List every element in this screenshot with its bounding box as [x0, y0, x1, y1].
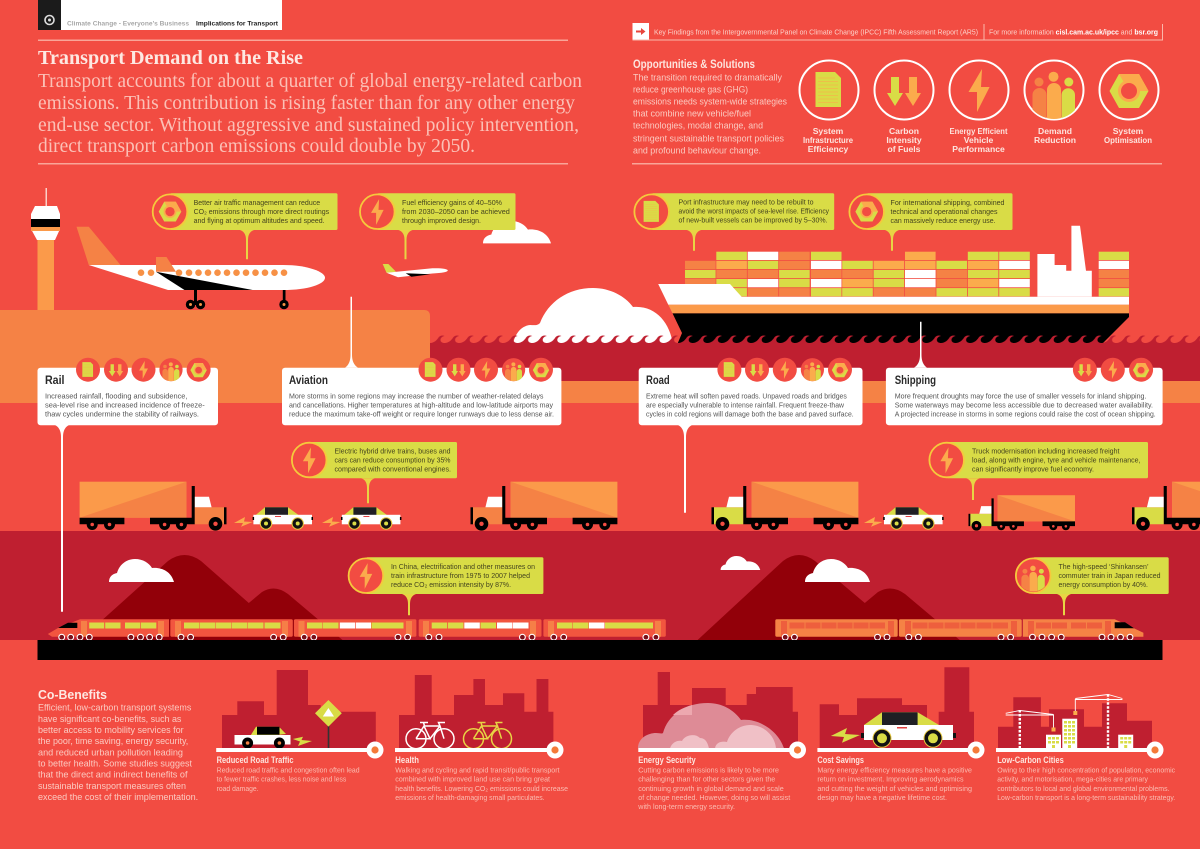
- opportunities and solutions text: that combine new vehicle/fuel: [633, 108, 751, 120]
- text: rail: thaw cycles undermine the stability of railways.: [45, 410, 199, 418]
- solution labels: System: [1113, 126, 1144, 136]
- opportunities and solutions text: [632, 57, 1162, 164]
- large aeroplane: [76, 227, 325, 309]
- clouds over mountains: [109, 556, 870, 582]
- callout: truck modernisation: Truck modernisation including increased freight: [972, 446, 1120, 456]
- solution labels: Intensity: [886, 135, 922, 145]
- icon: demand reduction: [1024, 60, 1084, 120]
- solution labels: [803, 126, 1152, 154]
- key findings strip: Key Findings from the Intergovernmental Panel on Climate Change (IPCC) Fifth Assessment Report (AR5): [654, 28, 978, 36]
- co-benefits intro: Efficient, low-carbon transport systems: [38, 702, 192, 712]
- callout: shinkansen: The high-speed ‘Shinkansen’: [1058, 562, 1149, 571]
- panel: low-carbon cities: Owing to their high concentration of population, economic: [997, 766, 1175, 774]
- callout: electric hybrid: cars can reduce consumption by 35%: [334, 456, 451, 464]
- text: aviation: reduce the maximum take-off weight or require longer runways due to less dense air.: [289, 410, 554, 418]
- intro text block: [38, 40, 582, 164]
- panel: energy security: Cutting carbon emissions is likely to be more: [638, 766, 779, 774]
- text: aviation: and cancellations. Higher temperatures at high-altitude and low-latitude airports may: [289, 400, 553, 410]
- text: shipping: Some waterways may become less accessible due to decreased water availability.: [895, 400, 1153, 410]
- opportunities and solutions text: and profound behaviour change.: [633, 146, 761, 156]
- text: shipping: [895, 392, 1156, 418]
- solution labels: Performance: [952, 144, 1005, 154]
- text: shipping: More frequent droughts may force the use of smaller vessels for inland shipping.: [895, 392, 1146, 400]
- callout: electric hybrid: Electric hybrid drive trains, buses and: [334, 446, 450, 456]
- large cloud behind ship: [513, 288, 673, 345]
- panel: cost savings: Many energy efficiency measures have a positive: [817, 766, 972, 774]
- opportunities and solutions text: The transition required to dramatically: [633, 72, 782, 84]
- panel: cost savings: [817, 667, 984, 802]
- text: road: are especially vulnerable to intense rainfall. Frequent freeze-thaw: [646, 400, 845, 410]
- co-benefits intro: the poor, time saving, energy security,: [38, 736, 188, 746]
- panel: energy security: [637, 672, 806, 811]
- header tab: Climate Change - Everyone’s Business: [67, 20, 189, 28]
- key findings strip: For more information cisl.cam.ac.uk/ipcc and bsr.org: [989, 28, 1158, 36]
- text: road: cycles in cold regions will damage both the base and paved surface.: [646, 410, 854, 418]
- text: aviation: More storms in some regions may increase the number of weather-related delays: [289, 392, 544, 400]
- solution labels: Optimisation: [1104, 135, 1152, 145]
- panel: low-carbon cities: activity, and motorisation, mega-cities are primary: [997, 775, 1148, 784]
- text: rail: Increased rainfall, flooding and subsidence,: [45, 392, 187, 400]
- heading: shipping: Shipping: [895, 373, 936, 387]
- solution labels: Vehicle: [964, 135, 994, 145]
- panel: energy security: continuing growth in global demand and scale: [638, 784, 784, 793]
- callout: international shipping: [849, 193, 1012, 251]
- intro text block: emissions. This contribution is rising faster than for any other energy: [38, 92, 575, 114]
- panel: aviation: [282, 358, 561, 425]
- icon: energy efficient vehicle performance: [950, 60, 1008, 120]
- co-benefits intro: Co-Benefits: [38, 687, 107, 702]
- panel: health: combined with improved land use can bring great: [395, 775, 551, 784]
- solution labels: Demand: [1038, 126, 1072, 136]
- heading: road: Road: [646, 373, 670, 387]
- co-benefits intro: have significant co-benefits, such as: [38, 714, 182, 724]
- panel: health: Health: [395, 755, 419, 765]
- header tab: Implications for Transport: [196, 20, 279, 28]
- callout: air traffic management: [153, 193, 338, 259]
- panel: cost savings: return on investment. Improving aerodynamics: [817, 775, 964, 784]
- cars with bolts: [234, 507, 944, 529]
- panel: cost savings: design may have a negative lifetime cost.: [817, 793, 947, 802]
- panel: reduced road traffic: Reduced road traffic and congestion often lead: [217, 766, 360, 774]
- panel: reduced road traffic: road damage.: [217, 784, 259, 793]
- panel: reduced road traffic: to fewer traffic crashes, less noise and less: [217, 775, 346, 784]
- panel: health: emissions of health-damaging small particulates.: [395, 793, 545, 802]
- text: road: Extreme heat will soften paved roads. Unpaved roads and bridges: [646, 392, 847, 400]
- intro text block: Transport accounts for about a quarter of global energy-related carbon: [38, 70, 582, 92]
- callout: fuel efficiency: Fuel efficiency gains of 40–50%: [402, 198, 502, 207]
- truck 2: [470, 482, 617, 531]
- panel: reduced road traffic: [216, 670, 384, 793]
- panel: energy security: of change needed. However, doing so will assist: [638, 793, 791, 802]
- solution labels: Energy Efficient: [950, 126, 1008, 136]
- callout: air traffic management: and flying at optimum altitudes and speed.: [194, 216, 325, 225]
- panel: low-carbon cities: Low-Carbon Cities: [997, 755, 1064, 765]
- opportunities and solutions text: stringent sustainable transport policies: [633, 134, 784, 144]
- panel: shipping: [886, 358, 1163, 425]
- mountains right: [698, 555, 960, 640]
- panel: energy security: with long-term energy security.: [637, 802, 735, 811]
- ground and road bands: [0, 310, 1200, 403]
- small aeroplane: [383, 264, 448, 277]
- track: [38, 640, 1162, 660]
- callout: air traffic management: Better air traffic management can reduce: [194, 198, 320, 207]
- container ship: [658, 226, 1129, 345]
- panel: energy security: challenging than for other sectors given the: [638, 775, 775, 784]
- opportunities and solutions text: reduce greenhouse gas (GHG): [633, 84, 748, 96]
- control tower: [31, 188, 60, 310]
- callout: electric hybrid: [292, 442, 457, 503]
- solution labels: System: [813, 126, 844, 136]
- solution labels: Infrastructure: [803, 135, 853, 145]
- solution labels: of Fuels: [888, 144, 921, 154]
- callout: china trains: [349, 557, 543, 615]
- callout: china trains: reduce CO₂ emission intensity by 87%.: [391, 580, 511, 589]
- panel: energy security: Energy Security: [638, 755, 696, 765]
- panel: cost savings: and cutting the weight of vehicles and optimising: [817, 784, 972, 793]
- callout: truck modernisation: can significantly improve fuel economy.: [972, 464, 1094, 474]
- callout: international shipping: can massively reduce energy use.: [890, 216, 996, 225]
- co-benefits intro: better access to mobility services for: [38, 725, 184, 735]
- icons: shipping: [1073, 358, 1153, 382]
- panel: low-carbon cities: Low-carbon transport is a long-term sustainability strategy.: [997, 793, 1175, 802]
- callout: truck modernisation: load, along with engine, tyre and vehicle maintenance,: [972, 456, 1140, 464]
- callout: fuel efficiency: from 2030–2050 can be achieved: [402, 207, 510, 216]
- co-benefits intro: to better health. Some studies suggest: [38, 758, 192, 768]
- panel: reduced road traffic: Reduced Road Traffic: [217, 755, 294, 765]
- co-benefits intro: exceed the cost of their implementation.: [38, 792, 198, 802]
- heading: rail: Rail: [45, 373, 64, 387]
- solution labels: Reduction: [1034, 135, 1076, 145]
- panel: rail: [38, 358, 218, 425]
- intro text block: end-use sector. Without aggressive and sustained policy intervention,: [38, 114, 579, 136]
- sea waves: [430, 335, 1200, 345]
- callout: shinkansen: energy consumption by 40%.: [1058, 580, 1148, 589]
- callout: port infrastructure: [634, 193, 834, 251]
- small cloud behind callout: [483, 221, 551, 243]
- callout: air traffic management: CO₂ emissions through more direct routings: [194, 207, 329, 216]
- panel: health: [395, 675, 568, 802]
- callout: truck modernisation: [929, 442, 1148, 500]
- callout: fuel efficiency: through improved design.: [402, 216, 481, 225]
- icon: carbon intensity of fuels: [874, 60, 934, 120]
- truck 4 small: [968, 495, 1075, 531]
- left train: [48, 619, 666, 640]
- truck 5: [1132, 482, 1200, 531]
- callout: port infrastructure: of new-built vessels can be improved by 5–30%.: [678, 216, 828, 224]
- text: shipping: A projected increase in storms in some regions could raise the cost of ocean shipping.: [895, 410, 1156, 418]
- co-benefits intro: sustainable transport measures often: [38, 781, 186, 791]
- right train: [775, 619, 1143, 640]
- callout: china trains: In China, electrification and other measures on: [391, 562, 535, 571]
- panel: cost savings: Cost Savings: [817, 755, 864, 765]
- callout: port infrastructure: avoid the worst impacts of sea-level rise. Efficiency: [678, 206, 829, 216]
- intro text block: direct transport carbon emissions could double by 2050.: [38, 135, 475, 157]
- solution labels: Efficiency: [808, 144, 849, 154]
- text: aviation: [289, 392, 554, 418]
- co-benefits intro: and reduced urban pollution leading: [38, 748, 183, 758]
- panel: low-carbon cities: [996, 694, 1175, 802]
- heading: aviation: Aviation: [289, 373, 328, 387]
- icons: aviation: [418, 358, 553, 382]
- icons: road: [717, 358, 852, 382]
- icon: system optimisation: [1100, 60, 1158, 120]
- callout: china trains: train infrastructure from 1975 to 2007 helped: [391, 571, 530, 580]
- callout: fuel efficiency: [360, 193, 516, 259]
- text: rail: sea-level rise and increased incidence of freeze-: [45, 400, 205, 410]
- truck 1: [80, 482, 226, 531]
- opportunities and solutions text: technologies, modal change, and: [633, 120, 763, 132]
- text: road: [646, 392, 854, 418]
- callout: shinkansen: commuter train in Japan reduced: [1058, 571, 1160, 580]
- pointer lines from panels: [55, 297, 927, 612]
- key findings strip: [632, 23, 1162, 40]
- intro text block: Transport Demand on the Rise: [38, 47, 303, 69]
- panel: health: Walking and cycling and rapid transit/public transport: [395, 766, 560, 774]
- header tab: [38, 0, 282, 30]
- co-benefits intro: that the direct and indirect benefits of: [38, 770, 188, 780]
- panel: low-carbon cities: contributors to local and global environmental problems.: [997, 784, 1170, 793]
- icons: rail: [76, 358, 211, 382]
- text: rail: [45, 392, 205, 418]
- co-benefits intro: [38, 687, 198, 802]
- icon: system infrastructure efficiency: [800, 60, 858, 120]
- panel: road: [639, 358, 862, 425]
- opportunities and solutions text: emissions needs system-wide strategies: [633, 96, 787, 108]
- panel: health: health benefits. Lowering CO₂ emissions could increase: [395, 784, 568, 793]
- callout: international shipping: technical and operational changes: [890, 207, 998, 216]
- callout: port infrastructure: Port infrastructure may need to be rebuilt to: [678, 198, 814, 206]
- opportunities and solutions text: Opportunities & Solutions: [633, 57, 755, 71]
- solution labels: Carbon: [889, 126, 919, 136]
- callout: electric hybrid: compared with conventional engines.: [334, 464, 451, 474]
- mountains left: [80, 555, 342, 640]
- callout: shinkansen: [1016, 557, 1169, 615]
- truck 3: [712, 482, 858, 531]
- callout: international shipping: For international shipping, combined: [890, 198, 1004, 207]
- road scene dark band: [0, 531, 1200, 640]
